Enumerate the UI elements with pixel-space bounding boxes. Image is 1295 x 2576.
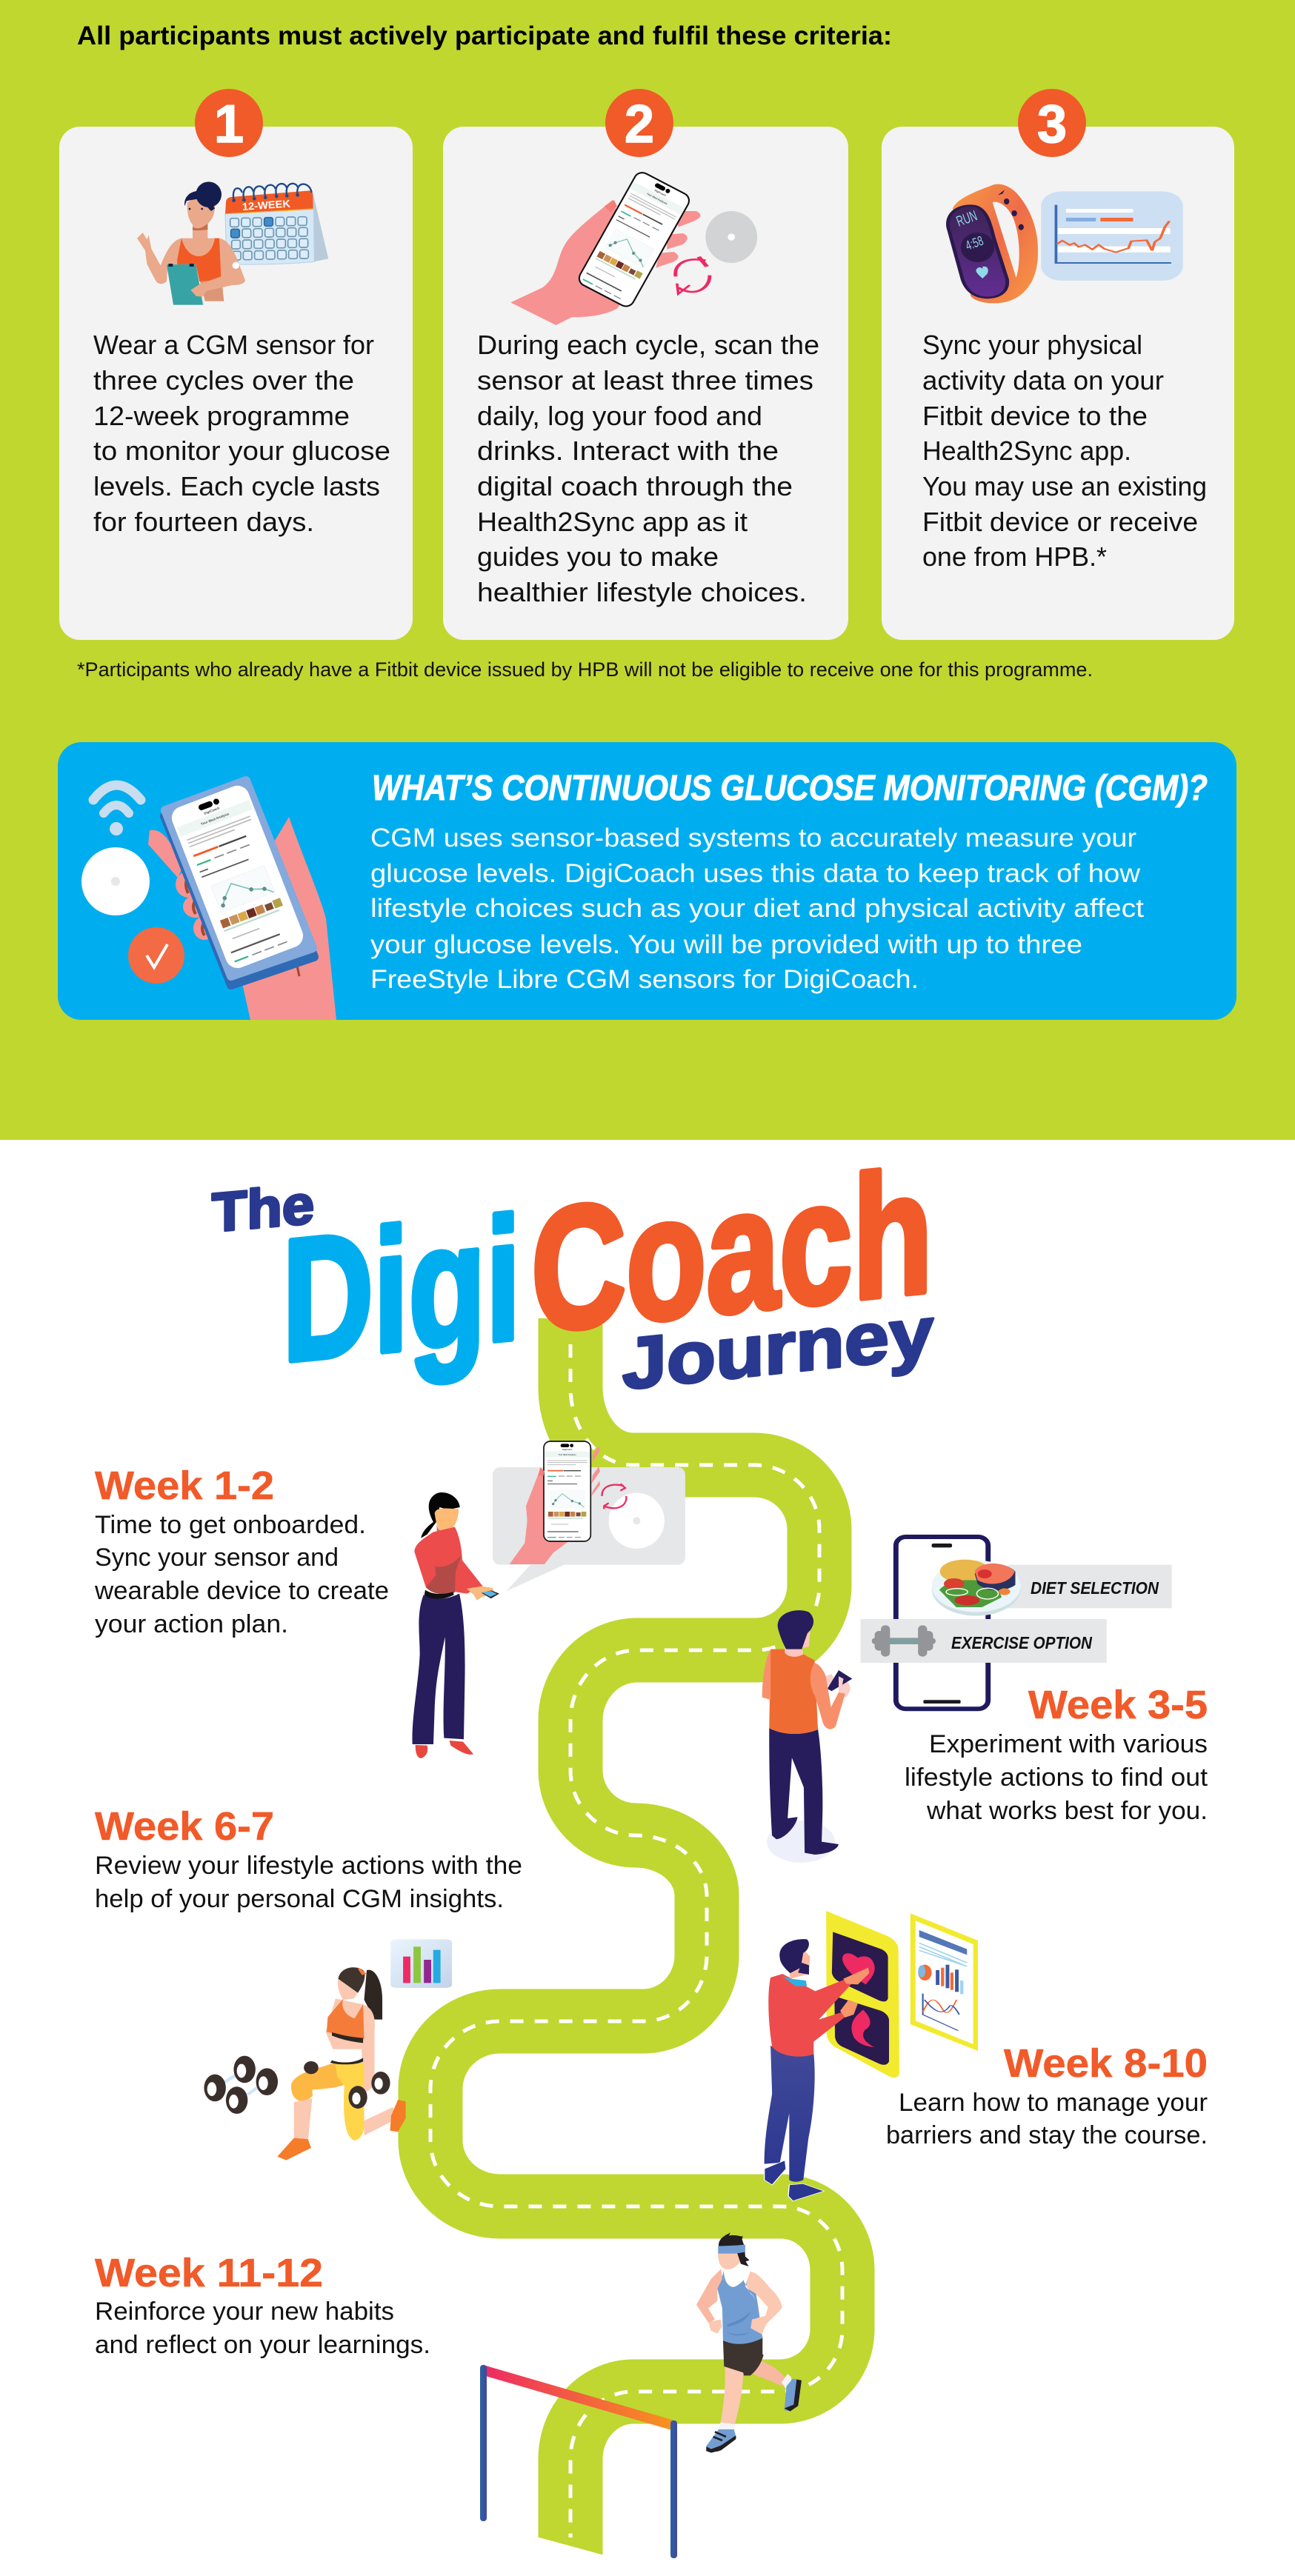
- text: criterion 3: one from HPB.*: [922, 541, 1107, 572]
- icon: wifi signal: [93, 785, 141, 835]
- badge: number 2: [605, 89, 673, 157]
- man figure: [765, 1939, 869, 2201]
- text: week 8-10: barriers and stay the course.: [886, 2121, 1208, 2149]
- icon: woman with 12-week calendar: [137, 181, 328, 305]
- label: time: 4:58: [964, 233, 985, 253]
- icon: fitness band and activity chart: [948, 184, 1183, 303]
- illustration: phone with diet and exercise options: [860, 1537, 1172, 1709]
- text: CGM explanation: your glucose levels. You will be provided with up to three: [370, 930, 1082, 959]
- text: week 11-12: Week 11-12: [95, 2251, 323, 2295]
- text: week 3-5: Week 3-5: [1028, 1683, 1208, 1727]
- icon: hand scanning sensor with phone: [510, 170, 757, 325]
- text: criterion 2: Health2Sync app as it: [477, 507, 748, 537]
- badge: number 3: 3: [1037, 95, 1067, 154]
- text: week 3-5: Experiment with various: [929, 1730, 1208, 1758]
- title: The DigiCoach Journey: [212, 1133, 933, 1405]
- text: criterion 3: [922, 330, 1207, 572]
- text: week 3-5: what works best for you.: [926, 1797, 1208, 1825]
- icon: white sensor disc: [81, 847, 150, 915]
- icon: salad plate: [932, 1560, 1021, 1616]
- footnote: *Participants who already have a Fitbit device issued by HPB will not be eligible to receive one for this programme.: [77, 658, 1093, 681]
- illustration: man using phone: [762, 1610, 852, 1863]
- text: criterion 3: You may use an existing: [922, 471, 1207, 501]
- text: criterion 2: healthier lifestyle choices.: [477, 577, 807, 607]
- badge: number 2: 2: [625, 95, 654, 154]
- text: week 3-5: lifestyle actions to find out: [905, 1764, 1208, 1792]
- text: criterion 2: guides you to make: [477, 541, 719, 572]
- text: week 6-7: Week 6-7: [95, 1804, 274, 1849]
- label: RUN: RUN: [954, 207, 979, 230]
- text: criterion 3: Sync your physical: [922, 330, 1142, 360]
- text: CGM explanation: FreeStyle Libre CGM sensors for DigiCoach.: [370, 965, 919, 994]
- icon: orange check badge: [128, 927, 184, 984]
- illustration: scan speech bubble: [493, 1441, 685, 1591]
- badge: number 1: [195, 89, 263, 157]
- text: week 6-7: Review your lifestyle actions with the: [95, 1852, 522, 1880]
- text: week 1-2: Sync your sensor and: [95, 1544, 339, 1572]
- text: CGM explanation: [370, 824, 1144, 994]
- text: criterion 3: Fitbit device or receive: [922, 507, 1198, 537]
- text: week 3-5: [905, 1683, 1208, 1825]
- text: week 11-12: and reflect on your learnings.: [95, 2331, 430, 2359]
- text: week 1-2: Time to get onboarded.: [95, 1511, 366, 1539]
- icon: report chart board: [911, 1913, 978, 2051]
- text: week 1-2: your action plan.: [95, 1610, 288, 1638]
- title word: Coach: Coach: [531, 1133, 933, 1369]
- panel: what is CGM: [58, 742, 1236, 1020]
- text: criterion 1: [93, 330, 390, 537]
- panel: criterion 1: [59, 89, 413, 640]
- text: criterion 2: During each cycle, scan the: [477, 330, 819, 360]
- panel: criterion 3: [882, 89, 1234, 640]
- heading: participation criteria: All participants must actively participate and fulfil these criteria:: [77, 21, 892, 50]
- text: criterion 2: digital coach through the: [477, 471, 793, 501]
- title word: Journey: Journey: [622, 1291, 933, 1405]
- text: CGM explanation: CGM uses sensor-based systems to accurately measure your: [370, 824, 1136, 852]
- text: CGM explanation: glucose levels. DigiCoach uses this data to keep track of how: [370, 859, 1141, 888]
- text: criterion 2: sensor at least three times: [477, 365, 813, 396]
- green background section: [0, 0, 1295, 1140]
- text: criterion 3: Health2Sync app.: [922, 436, 1131, 466]
- panel: criterion 2: [443, 89, 848, 640]
- icon: dumbbell: [872, 1625, 936, 1657]
- text: week 11-12: [95, 2251, 430, 2359]
- text: CGM explanation: lifestyle choices such as your diet and physical activity affect: [370, 894, 1144, 923]
- illustration: woman lunging with dumbbells: [204, 1967, 406, 2160]
- icon: insights bar chart tile: [390, 1939, 452, 1988]
- road: winding journey: [430, 1318, 842, 2576]
- illustration: runner: [696, 2232, 802, 2453]
- icon: yellow barrier board: [826, 1911, 899, 2078]
- text: week 1-2: wearable device to create: [94, 1577, 389, 1605]
- illustration: finish line hurdle: [480, 2365, 677, 2558]
- illustration: woman using phone: [412, 1492, 499, 1758]
- text: week 6-7: [95, 1804, 522, 1913]
- label: diet selection: DIET SELECTION: [1031, 1578, 1159, 1598]
- text: criterion 1: Wear a CGM sensor for: [93, 330, 374, 360]
- illustration: man at insight boards: [765, 1911, 978, 2201]
- badge: number 3: [1018, 89, 1086, 157]
- text: criterion 1: 12-week programme: [93, 401, 350, 431]
- text: criterion 1: three cycles over the: [93, 365, 354, 396]
- title word: The: The: [212, 1173, 314, 1244]
- text: week 1-2: [94, 1464, 389, 1638]
- text: criterion 1: to monitor your glucose: [93, 436, 390, 466]
- heading: what is CGM: WHAT’S CONTINUOUS GLUCOSE MONITORING (CGM)?: [372, 769, 1208, 808]
- text: week 8-10: Week 8-10: [1004, 2041, 1208, 2086]
- text: criterion 3: Fitbit device to the: [922, 401, 1148, 431]
- badge: number 1: 1: [214, 95, 244, 154]
- title word: Digi: Digi: [282, 1181, 521, 1398]
- text: criterion 2: [477, 330, 819, 607]
- text: week 8-10: [886, 2041, 1208, 2149]
- text: criterion 2: daily, log your food and: [477, 401, 762, 431]
- text: week 1-2: Week 1-2: [95, 1464, 274, 1508]
- text: week 6-7: help of your personal CGM insights.: [95, 1885, 504, 1913]
- label: exercise option: EXERCISE OPTION: [951, 1633, 1092, 1652]
- icon: woman with 12-week calendar: 12-WEEK: [242, 197, 290, 213]
- text: criterion 3: activity data on your: [922, 365, 1164, 396]
- text: criterion 1: levels. Each cycle lasts: [93, 471, 380, 501]
- text: criterion 1: for fourteen days.: [93, 507, 314, 537]
- text: week 8-10: Learn how to manage your: [899, 2089, 1208, 2117]
- white background section: [0, 1140, 1295, 2576]
- icon: hand holding phone: [148, 781, 336, 1020]
- text: criterion 2: drinks. Interact with the: [477, 436, 779, 466]
- text: week 11-12: Reinforce your new habits: [95, 2298, 394, 2326]
